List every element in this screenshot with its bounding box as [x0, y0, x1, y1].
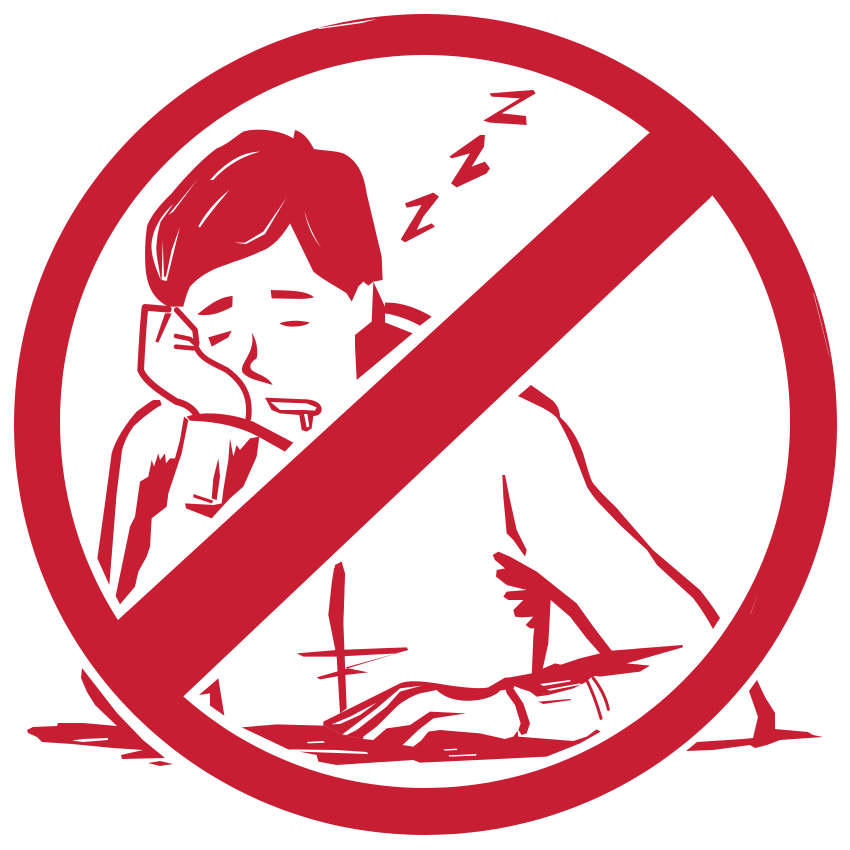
table highlights [290, 741, 477, 757]
collar [385, 303, 432, 326]
diagonal slash bar [100, 110, 735, 715]
hand on cheek, nose, mouth, sleeve [97, 307, 345, 630]
cuff top [187, 413, 293, 452]
back line of torso [518, 385, 720, 629]
upper sleeve stroke [502, 475, 527, 557]
nose [242, 333, 273, 385]
sleeve of forward arm [493, 475, 683, 735]
head: hair, eyes, collar [145, 130, 432, 380]
cuff shading right [185, 437, 259, 518]
sleeve shading left [116, 417, 188, 604]
small wedge [199, 678, 224, 716]
cuff hatching [505, 663, 600, 704]
lower-arm stroke fragment [328, 562, 345, 630]
table left outside ring [27, 668, 173, 766]
hand outline [141, 307, 249, 418]
mouth and drool [265, 398, 322, 432]
trailing sleeve strokes [587, 678, 608, 718]
letters: sleeping Z marks [0, 0, 536, 242]
right eye [271, 290, 314, 327]
ear and neck [355, 282, 413, 380]
upper arm sleeve line [97, 400, 162, 585]
hand contour [323, 677, 533, 739]
hair [145, 130, 383, 307]
left eye [197, 296, 233, 347]
finger line [155, 313, 172, 343]
forward arm, hand and table [199, 562, 601, 765]
cuff band [505, 687, 530, 735]
front sleeve fold [297, 562, 408, 713]
table top [242, 712, 601, 765]
table right outside ring [686, 680, 823, 751]
sleeve folds and elbow wedge [493, 552, 683, 677]
